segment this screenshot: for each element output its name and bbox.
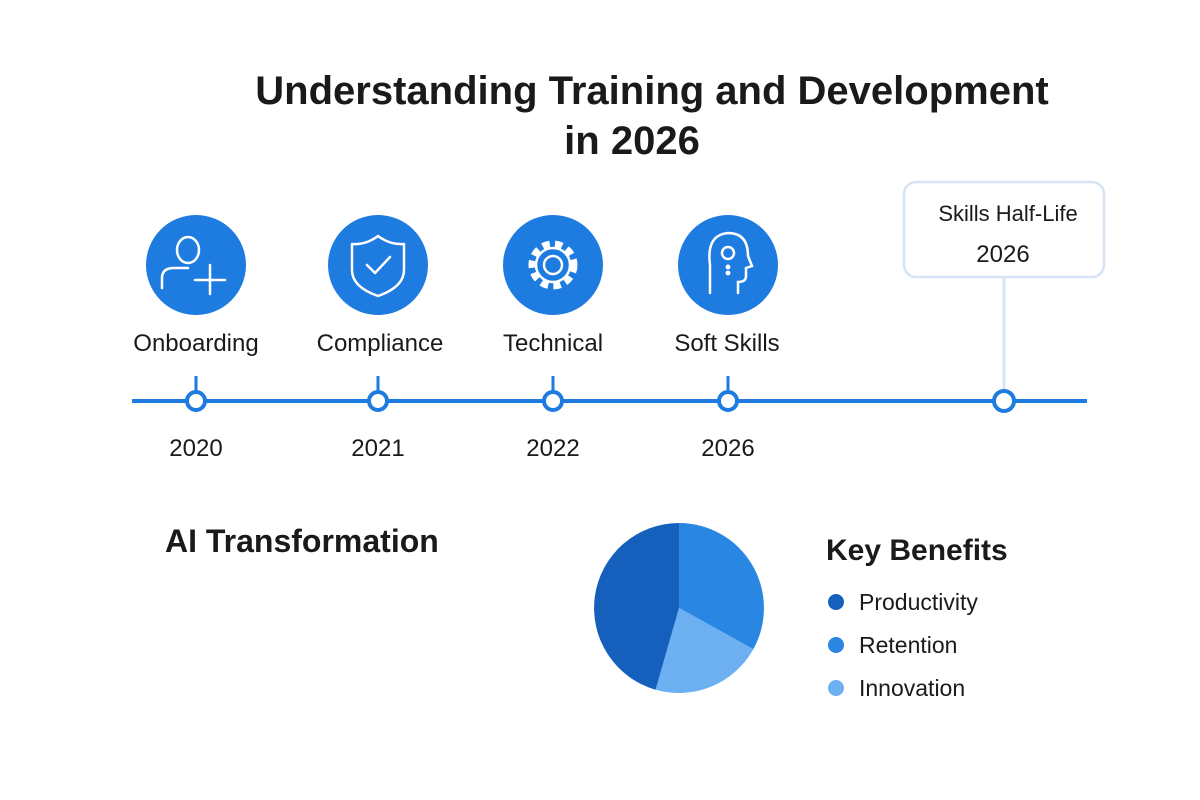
legend: key benefits: Productivity	[859, 589, 978, 615]
callout: skills half-life	[904, 182, 1104, 277]
callout: skills half-life: 2026	[976, 241, 1030, 268]
category labels: Compliance	[317, 330, 443, 357]
year labels: 2026	[701, 435, 755, 462]
category labels: Soft Skills	[674, 330, 780, 357]
heading: AI transformation: AI Transformation	[165, 523, 439, 559]
timeline axis	[132, 278, 1087, 411]
legend: key benefits: Retention	[859, 632, 957, 658]
title	[255, 69, 1049, 163]
title: in 2026	[564, 119, 700, 163]
pie chart	[594, 523, 764, 693]
title: Understanding Training and Development	[255, 69, 1049, 113]
category labels	[133, 330, 780, 357]
category labels: Technical	[503, 330, 603, 357]
legend: key benefits: Innovation	[859, 675, 965, 701]
icon: technical	[503, 215, 603, 315]
category labels: Onboarding	[133, 330, 259, 357]
year labels: 2022	[526, 435, 580, 462]
legend: key benefits: Key Benefits	[826, 534, 1008, 567]
legend: key benefits	[826, 534, 1008, 701]
icon: onboarding	[146, 215, 246, 315]
callout: skills half-life: Skills Half-Life	[938, 201, 1078, 226]
year labels: 2021	[351, 435, 405, 462]
icon: compliance	[328, 215, 428, 315]
year labels	[169, 435, 755, 462]
year labels: 2020	[169, 435, 223, 462]
icon: soft skills	[678, 215, 778, 315]
